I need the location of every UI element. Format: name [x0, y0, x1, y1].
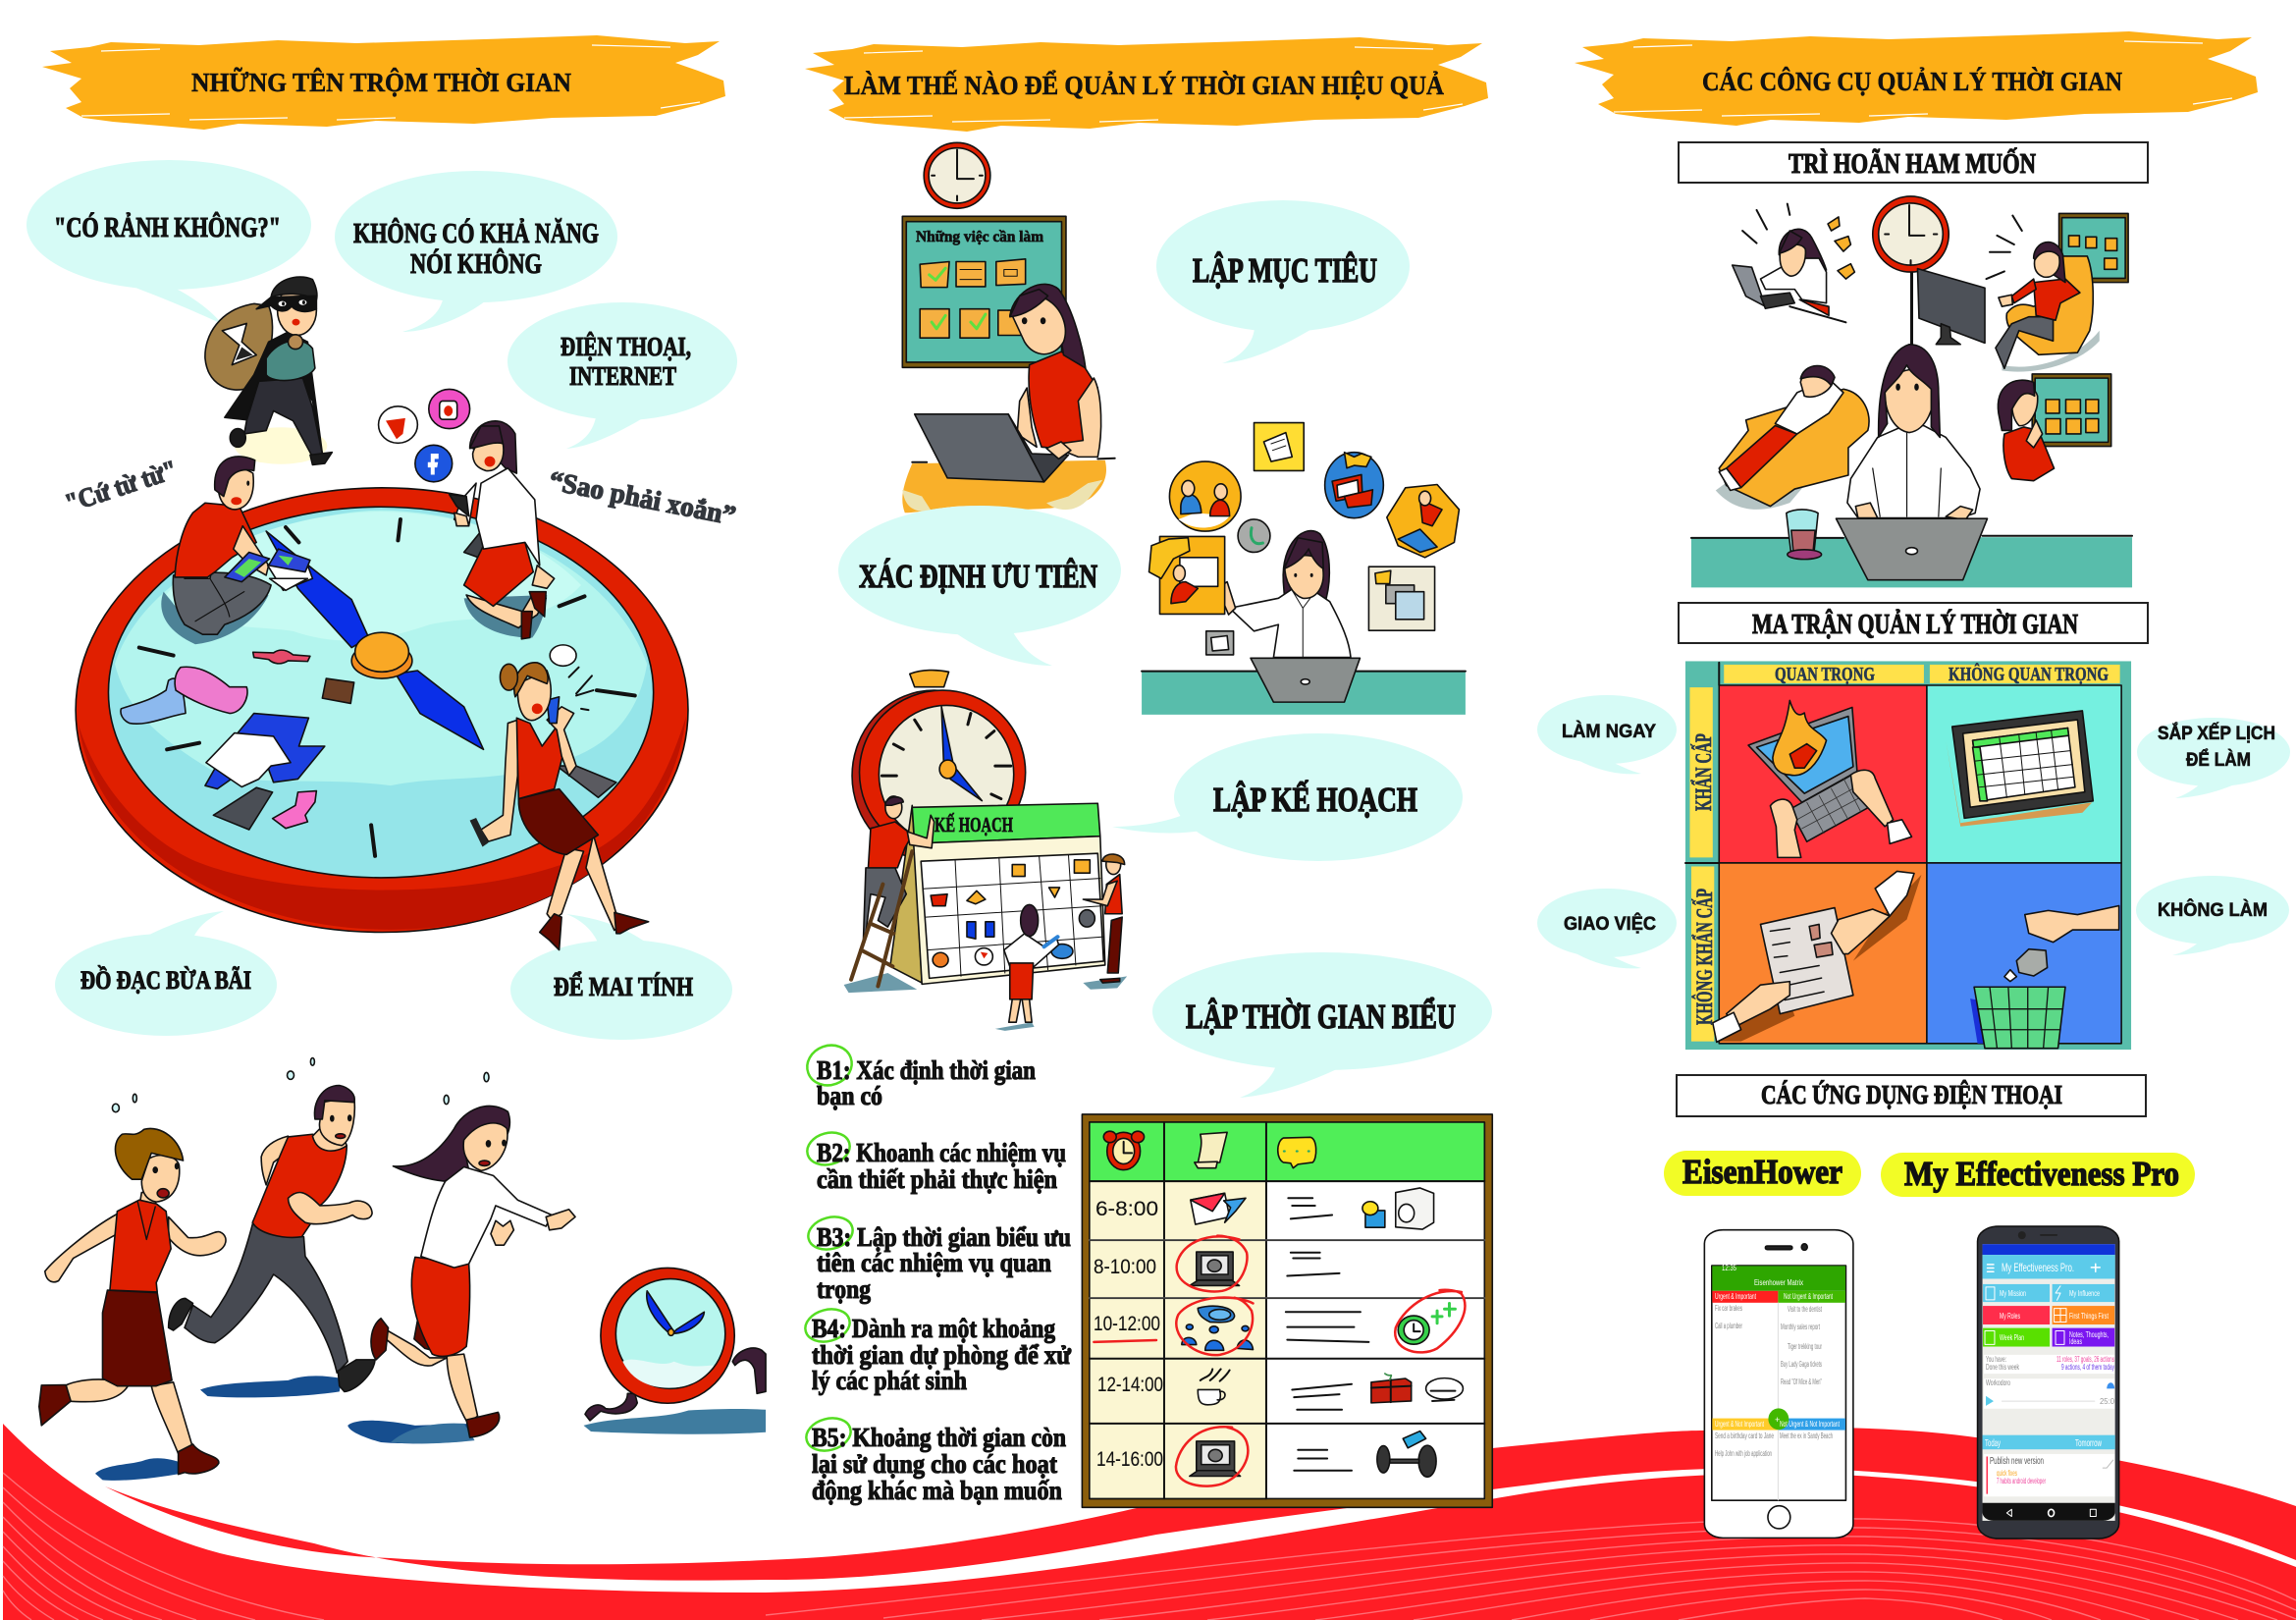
runner: woman in white shirt — [371, 1106, 575, 1437]
eisenhower matrix — [1685, 661, 2131, 1050]
scene: woman asleep in recliner — [1716, 365, 1869, 510]
phone screen text: + — [1775, 1415, 1780, 1425]
step 3 — [805, 1213, 1071, 1304]
bubble: sắp xếp lịch để làm — [2137, 718, 2290, 798]
table time labels: 14-16:00 — [1096, 1448, 1163, 1471]
bottom red wave background — [3, 1424, 2296, 1620]
app name: my effectiveness pro: My Effectiveness Pro — [1904, 1155, 2179, 1193]
matrix axis labels — [1690, 662, 2109, 1025]
banner: panel 2 title: LÀM THẾ NÀO ĐỂ QUẢN LÝ THỜI GIAN HIỆU QUẢ — [844, 70, 1444, 100]
bubble: không làm — [2136, 876, 2289, 955]
icon: handing over document — [1713, 871, 1921, 1042]
runaway clock with legs — [585, 1268, 766, 1421]
bubble: làm ngay — [1537, 695, 1677, 774]
icons in rows — [1094, 1188, 1465, 1486]
bubble: giao việc: GIAO VIỆC — [1564, 913, 1656, 935]
phone screen text: Read "Of Mice & Men" — [1781, 1377, 1822, 1386]
speech bubble: lập kế hoạch — [1112, 733, 1463, 861]
step 5: B5: Khoảng thời gian còn — [812, 1423, 1066, 1452]
illustration: woman at laptop with to-do board — [902, 142, 1115, 513]
heading: ma trận quản lý thời gian: MA TRẬN QUẢN LÝ THỜI GIAN — [1752, 610, 2078, 640]
character: thief with hourglass sack — [205, 277, 332, 464]
bubble: không làm: KHÔNG LÀM — [2158, 899, 2268, 921]
scene: busy worker — [1733, 204, 1854, 322]
banner: panel 2 title — [805, 37, 1488, 132]
speech bubble: xác định ưu tiên: XÁC ĐỊNH ƯU TIÊN — [859, 558, 1097, 595]
step 2: cần thiết phải thực hiện — [817, 1164, 1057, 1194]
speech bubble: không có khả năng nói không — [335, 171, 617, 332]
heading: các ứng dụng điện thoại — [1677, 1075, 2146, 1116]
phone screen text: Monthly sales report — [1781, 1323, 1820, 1331]
banner: panel 3 title: CÁC CÔNG CỤ QUẢN LÝ THỜI GIAN — [1702, 67, 2122, 96]
step 5: động khác mà bạn muốn — [812, 1476, 1062, 1505]
heading: trì hoãn ham muốn: TRÌ HOÃN HAM MUỐN — [1789, 148, 2036, 180]
phone: my effectiveness pro app — [1978, 1226, 2119, 1539]
phone screen text: First Things First — [2069, 1312, 2109, 1321]
phone screen text: Tiger trekking tour — [1788, 1342, 1822, 1351]
speech bubble: có rảnh không — [27, 160, 311, 324]
banner: panel 1 title — [42, 35, 725, 130]
step 1: B1: Xác định thời gian — [817, 1055, 1036, 1085]
speech bubble: đồ đạc bừa bãi: ĐỒ ĐẠC BỪA BÃI — [80, 966, 251, 995]
phone screen text: Week Plan — [2000, 1333, 2024, 1342]
big clock with scattered clutter — [76, 488, 688, 932]
phone screen text: quick fixes — [1997, 1469, 2017, 1478]
matrix axis labels: KHÔNG KHẨN CẤP — [1691, 889, 1717, 1025]
step 4: thời gian dự phòng để xử — [812, 1340, 1072, 1370]
step 4: lý các phát sinh — [812, 1366, 967, 1395]
phone screen text: Visit to the dentist — [1788, 1305, 1822, 1314]
illustration: woman presenting tasks at desk — [1142, 423, 1466, 715]
phone screen text: Call a plumber — [1715, 1322, 1742, 1330]
step 2 — [804, 1128, 1066, 1194]
phone screen text: 12:35 — [1722, 1264, 1736, 1272]
phone screen text: Publish new version — [1990, 1456, 2044, 1467]
icon: burning laptop — [1748, 700, 1912, 857]
step 4 — [802, 1305, 1072, 1395]
runner: woman with brown hair — [39, 1128, 226, 1475]
speech bubble: điện thoại, internet — [507, 302, 737, 449]
icon: tablet with calendar — [1946, 711, 2093, 827]
panel: những tên trộm thời gian — [27, 35, 766, 1481]
table time labels: 6-8:00 — [1095, 1198, 1158, 1220]
speech bubble: lập thời gian biểu — [1152, 952, 1492, 1098]
scene: woman thinking beside board — [1998, 374, 2111, 481]
phone screen text: Fix car brakes — [1715, 1304, 1742, 1313]
step 3: tiên các nhiệm vụ quan — [817, 1248, 1051, 1277]
phone screen text: Eisenhower Matrix — [1754, 1278, 1803, 1287]
phone screen text: 9 actions, 4 of them today — [2061, 1363, 2114, 1372]
speech bubble: để mai tính — [510, 914, 732, 1040]
phone screen text — [1715, 1264, 1840, 1458]
phone screen text: Help John with job application — [1715, 1449, 1772, 1458]
step 5: lại sử dụng cho các hoạt — [812, 1449, 1057, 1479]
panel: làm thế nào để quản lý thời gian hiệu quả — [802, 37, 1492, 1507]
phone screen text: Urgent & Not Important — [1715, 1420, 1764, 1429]
step 1 — [802, 1039, 1036, 1110]
panel: các công cụ quản lý thời gian — [1537, 31, 2290, 1539]
phone screen text: 7 habits android developer — [1997, 1477, 2046, 1485]
speech bubble: để mai tính: ĐỂ MAI TÍNH — [554, 971, 693, 1001]
phone screen text — [1985, 1261, 2115, 1485]
speech bubble: điện thoại, internet: INTERNET — [569, 361, 676, 391]
calendar label: KẾ HOẠCH — [934, 813, 1013, 837]
runner: man in red shirt — [169, 1085, 375, 1391]
app name: eisenhower: EisenHower — [1682, 1153, 1842, 1191]
phone screen text: Done this week — [1986, 1363, 2020, 1372]
central woman at laptop — [1787, 345, 1988, 580]
speech bubble: không có khả năng nói không: NÓI KHÔNG — [410, 247, 542, 280]
step 3: trọng — [817, 1274, 871, 1304]
step 3: B3: Lập thời gian biểu ưu — [817, 1222, 1071, 1252]
phone screen text: 25:0 — [2100, 1397, 2115, 1406]
phone screen text: My Effectiveness Pro. — [2002, 1261, 2074, 1274]
phone screen text: Tomorrow — [2075, 1438, 2102, 1449]
speech bubble: đồ đạc bừa bãi — [55, 911, 277, 1036]
phone screen text: Meet the ex in Sandy Beach — [1780, 1431, 1833, 1440]
speech bubble: lập kế hoạch: LẬP KẾ HOẠCH — [1213, 780, 1417, 819]
speech bubble: xác định ưu tiên — [838, 506, 1121, 666]
phone screen text: My Mission — [2000, 1289, 2026, 1298]
heading: ma trận quản lý thời gian — [1679, 603, 2148, 643]
phone screen text: Workodoro — [1986, 1378, 2010, 1387]
matrix axis labels: KHÔNG QUAN TRỌNG — [1949, 662, 2109, 685]
character: man reading books — [161, 457, 312, 644]
speech bubble: có rảnh không: "CÓ RẢNH KHÔNG?" — [54, 211, 281, 243]
quote: cứ từ từ: "Cứ từ từ" — [62, 455, 181, 518]
step 5 — [803, 1414, 1066, 1505]
phone screen text: Not Urgent & Important — [1784, 1292, 1833, 1301]
step 4: B4: Dành ra một khoảng — [812, 1314, 1055, 1343]
banner: panel 1 title: NHỮNG TÊN TRỘM THỜI GIAN — [191, 67, 571, 97]
schedule table — [1082, 1114, 1492, 1507]
bubble: sắp xếp lịch để làm: SẮP XẾP LỊCH — [2158, 723, 2275, 744]
step 1: bạn có — [817, 1081, 882, 1110]
phone: eisenhower matrix app — [1704, 1230, 1853, 1538]
phone screen text: 11 roles, 37 goals, 26 actions — [2056, 1355, 2114, 1364]
illustration: alarm clock and planning calendar — [844, 671, 1127, 1031]
matrix axis labels: QUAN TRỌNG — [1775, 664, 1875, 685]
phone screen text: Send a birthday card to Jane — [1715, 1431, 1774, 1440]
phone screen text: You have: — [1986, 1355, 2006, 1364]
steps list — [802, 1039, 1072, 1505]
scene: woman relaxing on armchair — [1987, 213, 2128, 372]
step 2: B2: Khoanh các nhiệm vụ — [817, 1138, 1066, 1167]
banner: panel 3 title — [1575, 31, 2258, 126]
phone screen text: Ideas — [2069, 1337, 2082, 1346]
speech bubble: lập thời gian biểu: LẬP THỜI GIAN BIỂU — [1186, 997, 1456, 1036]
illustration: three people chasing runaway clock — [39, 1058, 766, 1481]
phone screen text: Notes, Thoughts, — [2069, 1330, 2109, 1339]
speech bubble: lập mục tiêu — [1156, 200, 1410, 363]
phone screen text: Buy Lady Gaga tickets — [1781, 1360, 1822, 1369]
table time labels: 12-14:00 — [1097, 1374, 1163, 1396]
phone screen text: Not Urgent & Not Important — [1780, 1420, 1840, 1429]
character: woman with phone and social media icons — [379, 389, 555, 639]
icons in header — [1103, 1131, 1316, 1170]
bubble: giao việc — [1537, 889, 1677, 968]
phone screen text: Today — [1985, 1438, 2001, 1449]
phone screen text: My Influence — [2069, 1289, 2100, 1298]
table time labels: 8-10:00 — [1094, 1256, 1156, 1278]
table time labels: 10-12:00 — [1094, 1313, 1160, 1335]
to-do board label: Những việc cần làm — [916, 229, 1044, 245]
heading: các ứng dụng điện thoại: CÁC ỨNG DỤNG ĐIỆN THOẠI — [1761, 1080, 2062, 1109]
table time labels — [1094, 1198, 1163, 1471]
character: woman sitting and calling on phone — [470, 645, 649, 950]
speech bubble: điện thoại, internet: ĐIỆN THOẠI, — [561, 332, 691, 361]
phone screen text: My Roles — [2000, 1312, 2020, 1321]
bubble: làm ngay: LÀM NGAY — [1562, 721, 1656, 742]
matrix axis labels: KHẨN CẤP — [1690, 733, 1716, 811]
speech bubble: không có khả năng nói không: KHÔNG CÓ KHẢ NĂNG — [353, 217, 599, 249]
quote: sao phải xoắn: “Sao phải xoắn” — [547, 465, 738, 532]
speech bubble: lập mục tiêu: LẬP MỤC TIÊU — [1193, 250, 1377, 290]
illustration: procrastination scenes — [1691, 196, 2132, 587]
phone screen text: Urgent & Important — [1715, 1292, 1756, 1301]
icon: throwing paper in bin — [1970, 905, 2119, 1049]
heading: trì hoãn ham muốn — [1679, 142, 2148, 183]
bubble: sắp xếp lịch để làm: ĐỂ LÀM — [2186, 749, 2251, 771]
